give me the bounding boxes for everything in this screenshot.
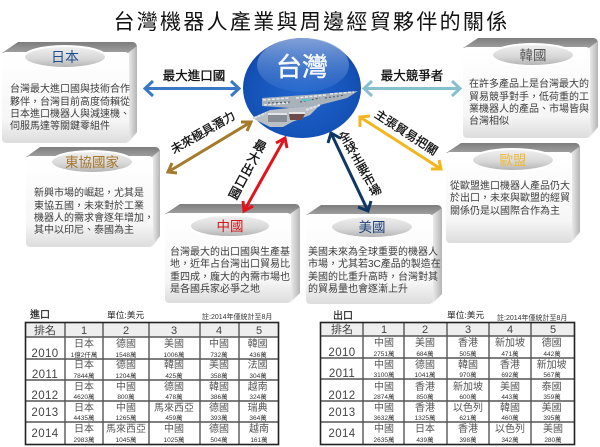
countries: 德國 [164, 380, 184, 393]
years: 2011 [32, 369, 58, 381]
amounts: 443萬 [501, 392, 519, 401]
countries: 中國 [374, 401, 394, 414]
amounts: 850萬 [416, 392, 434, 401]
amounts: 1億2仟萬 [71, 350, 98, 359]
arrow label: 全球主要市場: 要 [355, 160, 372, 178]
arrow: 全球主要市場 [328, 133, 371, 211]
arrow label: 最大競爭者: 最大競爭者 [381, 68, 443, 83]
amounts: 398萬 [459, 435, 477, 444]
countries: 韓國 [164, 359, 184, 371]
amounts: 684萬 [416, 349, 434, 358]
amounts: 364萬 [249, 413, 267, 422]
arrow label: 全球主要市場: 主 [349, 150, 366, 168]
amounts: 4620萬 [74, 392, 95, 401]
arrow label: 全球主要市場: 全 [337, 128, 354, 146]
amounts: 800萬 [117, 392, 135, 401]
text: 韓國 description: 業機器人的產品、市場皆與 [469, 102, 589, 115]
countries: 新加坡 [495, 336, 525, 349]
countries: 馬來西亞 [154, 402, 194, 414]
countries: 中國 [164, 422, 184, 435]
arrow label: 最大出口國: 最 [251, 137, 269, 156]
countries: 以色列 [453, 401, 483, 414]
countries: 美國 [415, 336, 435, 349]
text: 韓國 description: 台灣相似 [469, 114, 509, 127]
years: 2013 [31, 407, 59, 419]
countries: 日本 [74, 422, 94, 435]
amounts: 342萬 [501, 435, 519, 444]
arrow: 最大競爭者 [364, 81, 460, 96]
countries: 日本 [74, 380, 94, 393]
amounts: 478萬 [165, 392, 183, 401]
amounts: 161萬 [250, 435, 268, 444]
countries: 日本 [74, 358, 94, 371]
countries: 中國 [374, 358, 394, 371]
panel: 美國 [306, 205, 442, 304]
years: 2013 [328, 407, 356, 419]
table: 出口 [320, 322, 575, 445]
amounts: 732萬 [210, 350, 228, 359]
header row: 3 [171, 325, 177, 337]
countries: 瑞典 [248, 401, 268, 414]
label: 單位 (出口): 單位:美元 [447, 309, 484, 320]
countries: 越南 [248, 380, 268, 393]
heading: 日本: 日本 [51, 49, 79, 65]
globe: 台灣 [243, 38, 361, 138]
countries: 以色列 [495, 422, 525, 435]
countries: 泰國 [542, 380, 562, 393]
years: 2014 [328, 428, 356, 440]
heading: 韓國: 韓國 [520, 48, 546, 63]
amounts: 1045萬 [116, 435, 137, 444]
text: 東協國家 description: 機器人的需求會逐年增加， [34, 211, 154, 224]
countries: 馬來西亞 [106, 423, 146, 435]
amounts: 2751萬 [374, 349, 395, 358]
arrow: 未來極具潛力 [168, 122, 251, 173]
countries: 德國 [116, 337, 136, 350]
countries: 日本 [415, 422, 435, 435]
years: 2012 [31, 390, 59, 402]
heading: 東協國家: 東協國家 [65, 154, 119, 170]
countries: 香港 [500, 359, 520, 371]
amounts: 439萬 [416, 435, 434, 444]
countries: 德國 [209, 422, 229, 435]
header row: 2 [422, 324, 428, 336]
header row: 1 [381, 324, 387, 336]
amounts: 425萬 [165, 371, 183, 380]
amounts: 442萬 [543, 349, 561, 358]
countries: 中國 [374, 336, 394, 349]
countries: 中國 [374, 380, 394, 393]
text: 美國 description: 美國未來為全球重要的機器人 [308, 245, 438, 258]
countries: 中國 [374, 422, 394, 435]
text: 中國 description: 是各國兵家必爭之地 [170, 282, 260, 295]
text: 日本 description: 台灣最大進口國與技術合作 [10, 82, 130, 95]
amounts: 359萬 [543, 392, 561, 401]
header row: 1 [81, 325, 87, 337]
header row: 2 [123, 325, 129, 337]
arrow: 主張貿易把關 [360, 116, 441, 169]
text: 歐盟 description: 於出口，未來與歐盟的經貿 [450, 191, 570, 204]
icon: factory island [252, 91, 358, 127]
countries: 德國 [542, 336, 562, 349]
text: 歐盟 description: 關係仍是以國際合作為主 [450, 204, 560, 217]
arrow: 最大進口國 [145, 81, 239, 96]
text: 美國 description: 市場，尤其若3C產品的製造在 [308, 257, 441, 270]
text: 日本 description: 夥伴，台灣目前高度倚賴從 [10, 95, 130, 108]
amounts: 436萬 [249, 350, 267, 359]
amounts: 1041萬 [415, 370, 436, 379]
years: 2010 [31, 348, 59, 360]
countries: 德國 [415, 358, 435, 371]
countries: 中國 [116, 380, 136, 393]
amounts: 280萬 [544, 435, 562, 444]
amounts: 2635萬 [374, 435, 395, 444]
amounts: 395萬 [543, 413, 561, 422]
header row: 排名 [34, 323, 56, 337]
amounts: 970萬 [459, 370, 477, 379]
years: 2012 [328, 390, 356, 402]
amounts: 600萬 [459, 392, 477, 401]
heading: 中國: 中國 [216, 219, 244, 234]
heading: 歐盟: 歐盟 [500, 153, 526, 168]
note: 出口: 註:2014年僅統計至8月 [497, 313, 567, 322]
label: 出口: 出口 [333, 309, 353, 322]
text: 美國 description: 美國的比重升高時，台灣對其 [308, 270, 438, 283]
amounts: 304萬 [249, 371, 267, 380]
panel: 東協國家 [26, 147, 160, 247]
amounts: 459萬 [165, 413, 183, 422]
text: 日本 description: 日本進口機器人與減速機、 [10, 107, 130, 120]
arrow label: 全球主要市場: 場 [367, 181, 384, 200]
amounts: 505萬 [459, 349, 477, 358]
text: 日本 description: 伺服馬達等關鍵零組件 [10, 119, 110, 132]
text: 韓國 description: 在許多產品上是台灣最大的 [469, 77, 589, 90]
header row: 4 [507, 324, 513, 336]
header row: 4 [216, 325, 222, 337]
amounts: 692萬 [501, 370, 519, 379]
countries: 韓國 [500, 402, 520, 414]
countries: 韓國 [248, 338, 268, 350]
amounts: 460萬 [501, 413, 519, 422]
amounts: 1325萬 [415, 413, 436, 422]
countries: 香港 [415, 381, 435, 393]
amounts: 324萬 [249, 392, 267, 401]
label: 進口: 進口 [30, 309, 50, 321]
arrow label: 主張貿易把關: 主張貿易把關 [372, 107, 440, 158]
amounts: 7844萬 [74, 371, 95, 380]
countries: 美國 [500, 380, 520, 393]
text: 美國 description: 的貿易量也會逐漸上升 [308, 282, 408, 295]
arrow label: 全球主要市場: 球 [343, 139, 360, 157]
countries: 新加坡 [537, 358, 567, 371]
table: 進口 [25, 322, 279, 445]
panel: 韓國 [463, 38, 598, 138]
countries: 日本 [74, 337, 94, 350]
panel: 中國 [165, 204, 300, 303]
countries: 中國 [116, 401, 136, 414]
arrow label: 未來極具潛力: 未來極具潛力 [168, 108, 238, 157]
arrow label: 最大出口國: 大 [245, 149, 262, 167]
amounts: 567萬 [543, 370, 561, 379]
arrow label: 全球主要市場: 市 [360, 170, 378, 189]
amounts: 386萬 [210, 392, 228, 401]
amounts: 1265萬 [116, 413, 137, 422]
text: 歐盟 description: 從歐盟進口機器人產品仍大 [450, 179, 570, 192]
countries: 美國 [164, 337, 184, 350]
countries: 越南 [249, 422, 269, 435]
label: 單位 (進口): 單位:美元 [107, 309, 144, 320]
countries: 德國 [209, 401, 229, 414]
countries: 美國 [209, 358, 229, 371]
countries: 法國 [248, 358, 268, 371]
text: 中國 description: 台灣最大的出口國與生產基 [170, 245, 290, 258]
globe label: 台灣 [276, 52, 328, 82]
amounts: 1548萬 [116, 350, 137, 359]
text: 東協國家 description: 其中以印尼、泰國為主 [34, 223, 134, 236]
arrow label: 最大進口國: 最大進口國 [163, 69, 225, 83]
years: 2011 [329, 368, 355, 380]
years: 2010 [328, 347, 356, 359]
countries: 日本 [74, 401, 94, 414]
arrow label: 最大出口國: 出 [238, 161, 256, 179]
amounts: 2874萬 [374, 392, 395, 401]
arrow label: 最大出口國: 國 [226, 184, 244, 203]
text: 東協國家 description: 東協五國，未來對於工業 [34, 199, 144, 212]
amounts: 2983萬 [74, 435, 95, 444]
amounts: 3632萬 [374, 413, 395, 422]
amounts: 1006萬 [164, 350, 185, 359]
countries: 美國 [542, 401, 562, 414]
countries: 新加坡 [453, 380, 483, 393]
countries: 美國 [543, 422, 563, 435]
amounts: 358萬 [210, 371, 228, 380]
amounts: 4435萬 [74, 413, 95, 422]
panel: 歐盟 [446, 143, 580, 243]
heading: 美國: 美國 [358, 220, 386, 235]
text: 韓國 description: 貿易競爭對手，低荷重的工 [469, 90, 589, 103]
amounts: 1025萬 [164, 435, 185, 444]
countries: 香港 [415, 402, 435, 414]
amounts: 471萬 [501, 349, 519, 358]
countries: 香港 [458, 423, 478, 435]
title: 台灣機器人產業與周邊經貿夥伴的關係 [113, 11, 510, 34]
countries: 韓國 [209, 381, 229, 393]
countries: 韓國 [458, 359, 478, 371]
note: 進口: 註:2014年僅統計至8月 [202, 312, 272, 321]
text: 中國 description: 地，近年占台灣出口貿易比 [170, 257, 290, 270]
amounts: 1204萬 [116, 371, 137, 380]
header row: 排名 [331, 322, 353, 336]
countries: 德國 [116, 358, 136, 371]
arrow label: 最大出口國: 口 [232, 173, 250, 191]
text: 東協國家 description: 新興市場的崛起，尤其是 [34, 186, 144, 199]
years: 2014 [31, 428, 59, 440]
header row: 5 [256, 325, 262, 337]
panel: 日本 [2, 42, 137, 143]
header row: 5 [550, 324, 556, 336]
countries: 香港 [458, 337, 478, 349]
text: 中國 description: 重四成，龐大的內需市場也 [170, 270, 290, 283]
amounts: 621萬 [459, 413, 477, 422]
amounts: 504萬 [210, 435, 228, 444]
amounts: 393萬 [210, 413, 228, 422]
arrow: 最大出口國 [243, 138, 287, 211]
header row: 3 [465, 324, 471, 336]
countries: 中國 [209, 337, 229, 350]
amounts: 3100萬 [374, 370, 395, 379]
